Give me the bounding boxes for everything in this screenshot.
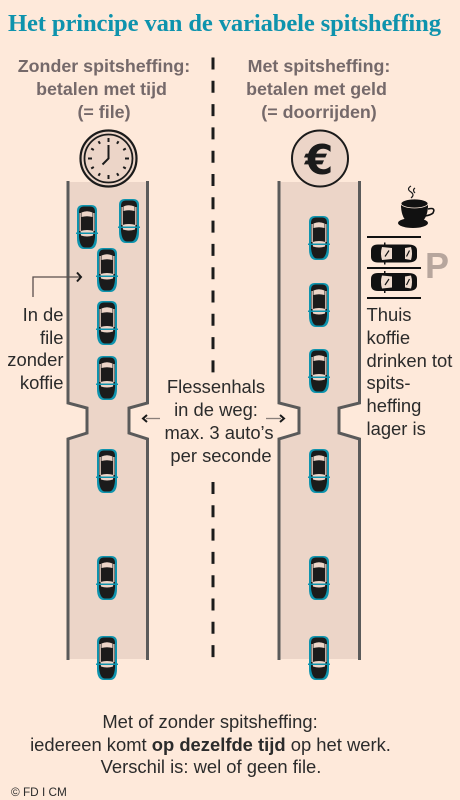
text: in de file zonder koffie: koffie (20, 372, 64, 393)
text: bottleneck: in de weg: (174, 399, 258, 420)
heading: with toll (246, 56, 390, 122)
parking letter: P (425, 245, 449, 286)
heading: without toll (18, 56, 190, 122)
heading: with toll: betalen met geld (246, 79, 387, 99)
heading: with toll: Met spitsheffing: (248, 56, 390, 76)
text: coffee at home: koffie (366, 327, 410, 348)
icon: coffee cup (398, 186, 434, 228)
text: coffee at home: spits- (366, 372, 410, 393)
bottom summary: iedereen komt op dezelfde tijd op het werk. (30, 734, 391, 755)
bottom summary: Verschil is: wel of geen file. (101, 756, 321, 777)
centre dashed divider (212, 58, 214, 659)
credit: © FD I CM (11, 785, 67, 799)
text: bottleneck: Flessenhals (167, 376, 265, 397)
icon: euro coin: € (304, 136, 333, 184)
text: bottleneck: max. 3 auto’s (164, 422, 274, 443)
parked cars (371, 242, 417, 293)
icon: euro coin (292, 130, 348, 186)
text: in de file zonder koffie (7, 304, 64, 393)
left road (68, 181, 148, 660)
text: in de file zonder koffie: zonder (7, 349, 64, 370)
cars: right road (flowing) (308, 216, 330, 680)
heading: with toll: (= doorrijden) (261, 102, 377, 122)
heading: without toll: betalen met tijd (36, 79, 167, 99)
heading: without toll: Zonder spitsheffing: (18, 56, 190, 76)
arrow: to queue (33, 272, 81, 297)
text: coffee at home: Thuis (366, 304, 411, 325)
title: Het principe van de variabele spitsheffing (8, 10, 442, 37)
text: coffee at home (366, 304, 452, 439)
arrow: bottleneck right (266, 415, 284, 422)
cars: left road (queue) (76, 199, 140, 680)
text: in de file zonder koffie: In de (23, 304, 64, 325)
arrow: bottleneck left (143, 415, 160, 422)
text: coffee at home: heffing (366, 395, 421, 416)
icon: clock (80, 130, 136, 186)
bottom summary (30, 711, 391, 777)
heading: without toll: (= file) (77, 102, 131, 122)
text: bottleneck (164, 376, 274, 466)
text: bottleneck: per seconde (170, 445, 272, 466)
text: coffee at home: lager is (366, 418, 426, 439)
right road (279, 181, 360, 660)
parking lines (367, 237, 421, 298)
text: in de file zonder koffie: file (40, 327, 64, 348)
bottom summary: Met of zonder spitsheffing: (102, 711, 318, 732)
text: coffee at home: drinken tot (366, 350, 452, 371)
